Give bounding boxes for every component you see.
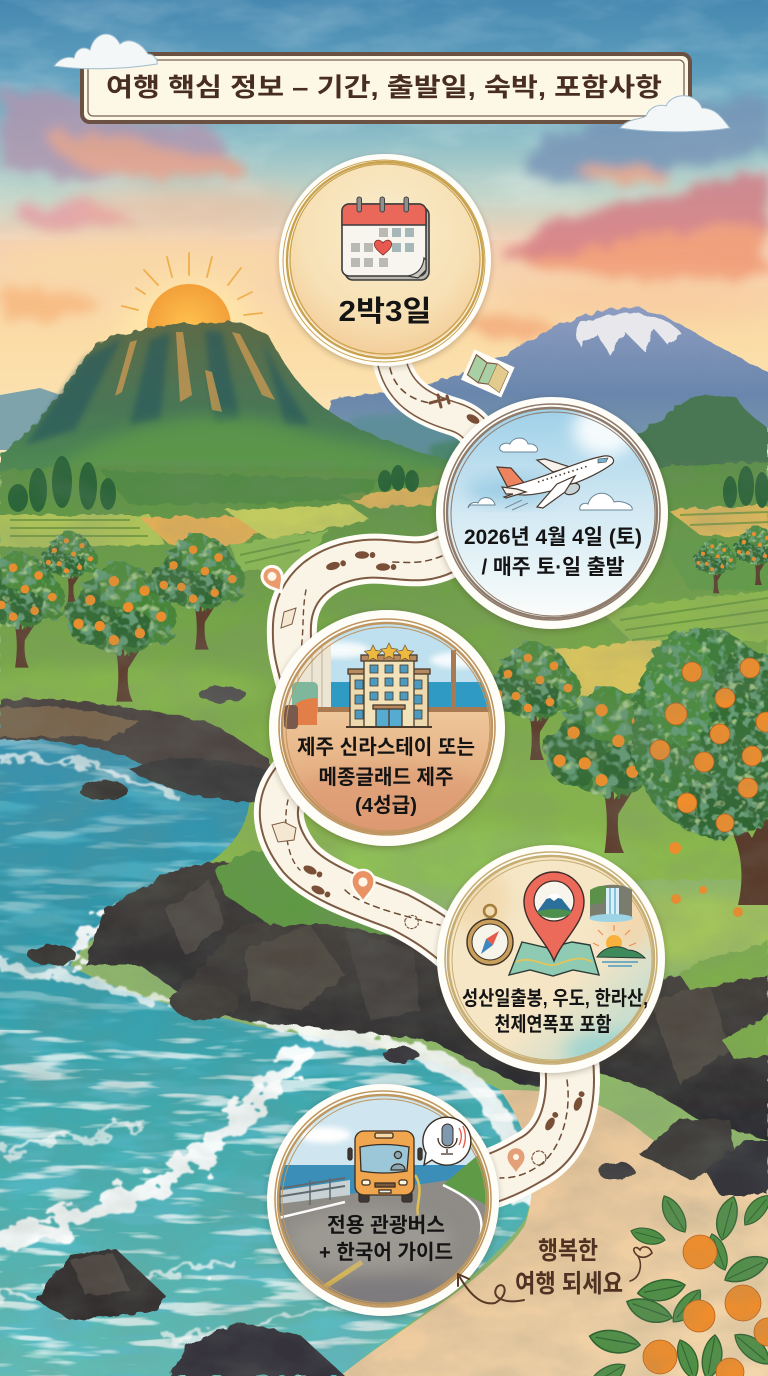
text: departure date: / 매주 토·일 출발 xyxy=(482,556,624,579)
icon: small plane on road xyxy=(430,395,449,407)
text: accommodation: 제주 신라스테이 또는 xyxy=(297,736,475,759)
icons: clouds in plane scene xyxy=(468,438,632,510)
text: accommodation: (4성급) xyxy=(355,794,417,817)
text: accommodation xyxy=(297,736,475,817)
background: watercolor sky xyxy=(0,0,768,470)
icon: red location pin xyxy=(524,872,584,961)
winding road 1 xyxy=(390,352,492,470)
orange branches: bottom right xyxy=(585,1190,768,1376)
text: bus and guide: 전용 관광버스 xyxy=(327,1214,445,1237)
icon: orange pin on road 3 xyxy=(352,870,374,902)
callout: happy travel note xyxy=(458,1237,652,1303)
banner title text: 여행 핵심 정보 – 기간, 출발일, 숙박, 포함사항 xyxy=(106,74,662,102)
text: duration: 2박3일 xyxy=(338,295,432,328)
sea rocks: bottom xyxy=(36,1248,345,1376)
orange trees: right group xyxy=(487,526,768,853)
banner clouds: left xyxy=(54,34,157,69)
icon: orange bus xyxy=(348,1131,422,1202)
icon: sunrise over island xyxy=(593,925,645,966)
text: departure date: 2026년 4월 4일 (토) xyxy=(464,526,642,549)
icon: airplane xyxy=(497,456,614,510)
distant blue mountain xyxy=(0,308,768,480)
text: included attractions: 성산일출봉, 우도, 한라산, xyxy=(462,987,648,1010)
icon: small sprout xyxy=(630,1247,652,1281)
circle 5: bus and guide xyxy=(267,1084,500,1320)
text: greeting: 행복한 xyxy=(538,1237,598,1265)
big orange tree xyxy=(631,628,768,917)
winding road 3 xyxy=(272,778,462,955)
sea xyxy=(0,725,532,1376)
sky clouds xyxy=(0,0,768,339)
sandy beach xyxy=(340,1090,768,1376)
icon: hotel stars xyxy=(364,643,414,661)
text: greeting: 여행 되세요 xyxy=(515,1270,623,1298)
black basalt rocks: right coast xyxy=(590,940,768,1195)
circle 3: accommodation xyxy=(269,610,505,855)
black basalt rocks: upper shore xyxy=(0,686,272,965)
icon: hotel building xyxy=(346,655,432,727)
circle 1: trip duration xyxy=(279,154,491,366)
icon: compass xyxy=(467,905,513,965)
arrow: pointing to circle 5 xyxy=(458,1274,524,1303)
circle 2: departure date xyxy=(436,397,668,629)
black basalt cliffs: central coast xyxy=(85,860,600,1090)
title banner xyxy=(54,34,730,132)
icon: waterfall xyxy=(589,885,633,922)
text: departure date xyxy=(464,526,642,579)
small green volcano xyxy=(638,394,768,480)
sun with rays xyxy=(118,253,262,422)
winding road 4 xyxy=(480,1060,586,1182)
text: accommodation: 메종글래드 제주 xyxy=(318,766,454,789)
icon: folded map sticker xyxy=(461,349,515,397)
text: bus and guide: + 한국어 가이드 xyxy=(319,1241,453,1264)
banner clouds: right xyxy=(620,96,730,132)
text: included attractions xyxy=(462,987,648,1036)
land: green fields xyxy=(0,456,768,966)
foam and waves xyxy=(0,725,532,1376)
large crater mountain xyxy=(0,322,470,510)
icon: microphone speech bubble xyxy=(423,1117,471,1165)
orange trees: left group xyxy=(0,531,246,702)
text: bus and guide xyxy=(319,1214,453,1264)
text: included attractions: 천제연폭포 포함 xyxy=(494,1013,612,1036)
icon: orange pin on road 4 xyxy=(508,1148,524,1172)
grass on cliff top xyxy=(215,853,450,950)
watercolor mottling texture xyxy=(0,460,768,1376)
text: greeting xyxy=(515,1237,623,1298)
icon: folded map xyxy=(509,942,599,976)
circle 4: included attractions xyxy=(437,845,665,1073)
icon: calendar xyxy=(342,197,429,280)
icon: orange pin on road 2 xyxy=(258,563,290,597)
winding road 2 xyxy=(281,551,450,680)
